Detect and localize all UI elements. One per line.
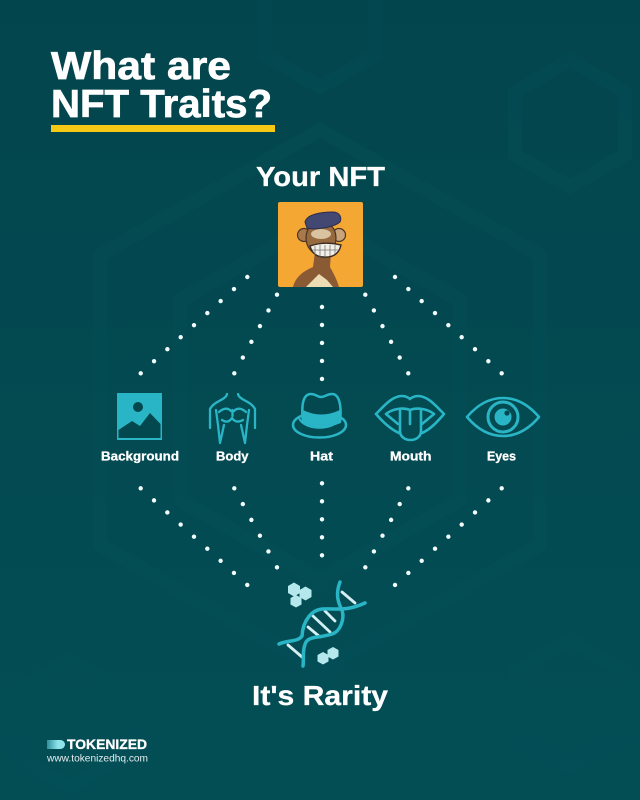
label: hat: Hat bbox=[310, 448, 334, 464]
title: NFT Traits? bbox=[51, 83, 272, 126]
icon: body bbox=[210, 394, 255, 443]
NFT ape image bbox=[278, 202, 363, 287]
label: background: Background bbox=[101, 448, 179, 464]
icon: eye bbox=[467, 398, 539, 436]
title underline bbox=[51, 125, 275, 132]
title: What are bbox=[51, 45, 231, 88]
label: eyes: Eyes bbox=[487, 448, 516, 464]
heading: your NFT: Your NFT bbox=[256, 161, 385, 192]
label: mouth: Mouth bbox=[390, 448, 432, 464]
icon: hat bbox=[293, 394, 346, 438]
dotted connectors: traits to rarity bbox=[141, 483, 502, 585]
label: body: Body bbox=[216, 448, 249, 464]
dotted connectors: NFT to traits bbox=[141, 277, 502, 379]
icon: background image bbox=[117, 393, 162, 440]
website url: www.tokenizedhq.com bbox=[46, 752, 148, 764]
heading: it's rarity: It's Rarity bbox=[252, 680, 388, 711]
icon: mouth bbox=[376, 396, 444, 440]
title bbox=[51, 45, 272, 126]
icon: DNA helix bbox=[279, 582, 365, 666]
logo: tokenized: TOKENIZED bbox=[67, 737, 147, 752]
